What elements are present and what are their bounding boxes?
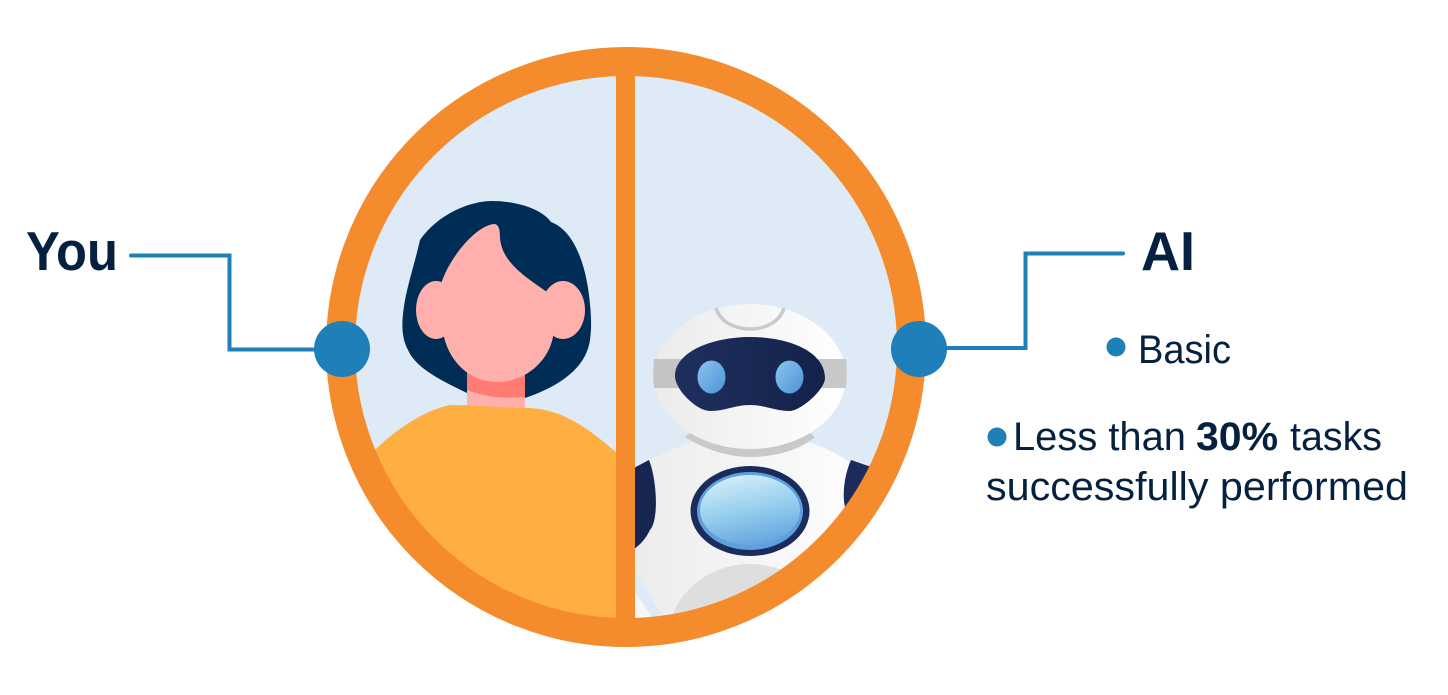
neck shadow ring [685, 433, 815, 457]
label: AI: AI [1141, 220, 1195, 282]
connector: AI [945, 254, 1123, 348]
chest rim [697, 472, 803, 550]
lower body panel [673, 564, 780, 614]
label: You: You [26, 220, 118, 282]
text: successfully performed: successfully performed [986, 465, 1408, 509]
chest screen [700, 475, 800, 545]
left ear [416, 281, 444, 339]
sweater [375, 405, 616, 618]
lower left leg [635, 592, 652, 618]
head band [653, 359, 847, 388]
lower left strip [635, 572, 662, 616]
robot body [635, 442, 850, 616]
neck shadow [467, 370, 525, 398]
right eye [776, 360, 804, 394]
bullet dot [1106, 338, 1126, 356]
text: Less than: Less than [1013, 415, 1186, 459]
neck [467, 390, 525, 408]
visor [675, 337, 825, 411]
circle background [354, 75, 898, 619]
text: 30%: 30% [1196, 415, 1278, 459]
robot head [654, 304, 846, 449]
node: You [314, 321, 370, 377]
portrait: robot [635, 304, 870, 618]
right arm [844, 460, 870, 506]
chest outer ring [690, 466, 810, 556]
left eye [698, 360, 726, 394]
node: AI [891, 321, 947, 377]
connector: You [131, 256, 320, 350]
center divider [616, 60, 635, 635]
orange ring [340, 62, 912, 632]
bullet: Basic [1106, 328, 1231, 372]
right ear [546, 281, 585, 339]
hair [402, 201, 591, 398]
portrait: person [375, 201, 616, 618]
text: tasks: tasks [1290, 415, 1382, 459]
bullet dot [988, 428, 1006, 446]
antenna arc [716, 308, 784, 329]
face [440, 224, 554, 382]
text: Basic: Basic [1138, 328, 1231, 372]
bullet: tasks performed [986, 415, 1408, 509]
left arm [635, 460, 656, 548]
